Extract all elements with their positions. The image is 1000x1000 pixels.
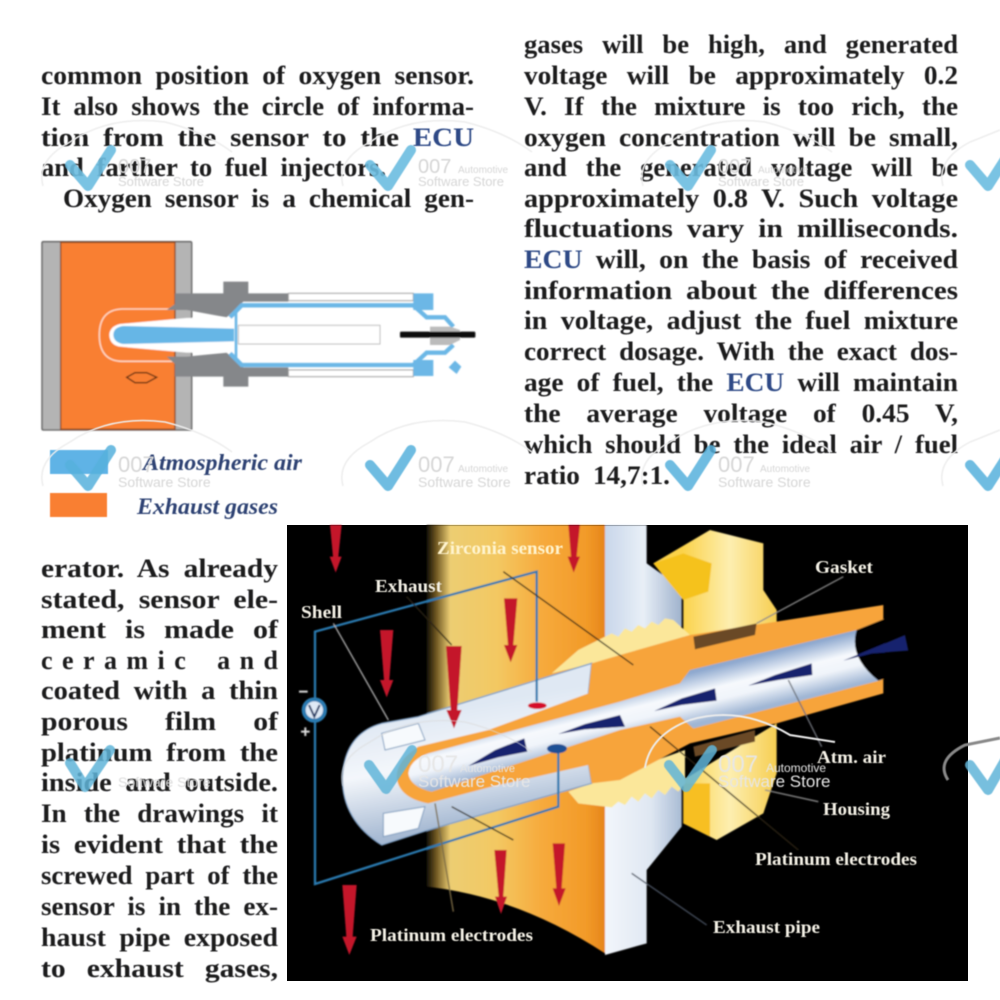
upper nut (653, 530, 777, 660)
top left text column: and farther to fuel injectors. (41, 153, 386, 182)
watermarks: Software Store (418, 174, 504, 189)
gaskets (693, 623, 757, 757)
bottom left text column: stated, sensor ele- (41, 585, 278, 614)
right text column: oxygen concentration will be small, (524, 123, 958, 152)
bottom left text column: haust pipe exposed (41, 923, 279, 952)
outer shield (342, 663, 592, 845)
bottom left text column (41, 554, 279, 983)
right text column: information about the differences (524, 276, 958, 305)
right text column: which should be the ideal air / fuel (524, 430, 958, 459)
polarity marks (299, 692, 310, 736)
watermarks (42, 121, 1000, 791)
bottom left text column: platinum from the (41, 738, 278, 767)
callouts (301, 538, 917, 945)
upper thread (552, 618, 690, 673)
watermarks: Software Store (718, 174, 804, 189)
slots in shield (382, 723, 425, 837)
bottom left text column: erator. As already (41, 554, 278, 583)
ceramic element (109, 317, 233, 353)
watermarks: Automotive (758, 165, 808, 176)
electrodes (528, 702, 547, 709)
exhaust pipe wall (427, 525, 605, 953)
label: atmospheric air: Atmospheric air (141, 450, 303, 475)
swatch: atmospheric air (50, 450, 108, 474)
bottom left text column: is evident that the (41, 830, 278, 859)
watermarks: 007 (418, 452, 455, 477)
callouts: Platinum electrodes (755, 849, 917, 869)
upper flange (605, 525, 682, 660)
lower nut (683, 723, 777, 840)
voltmeter symbol (309, 705, 320, 717)
leader lines (333, 572, 843, 925)
callouts: Shell (301, 602, 342, 622)
contact pin (400, 332, 475, 338)
right text column (524, 30, 959, 490)
right text column: approximately 0.8 V. Such voltage (524, 184, 958, 213)
terminal (430, 327, 460, 345)
watermark row 2 (42, 421, 1000, 486)
lower flange (605, 773, 682, 955)
bottom left text column: ment is made of (41, 615, 278, 644)
callouts: Platinum electrodes (370, 925, 533, 945)
bottom left text column: In the drawings it (41, 799, 278, 828)
photo diagram: sensor in exhaust pipe (287, 525, 968, 981)
lower thread (568, 750, 685, 807)
diagram: oxygen sensor cross-section (42, 242, 475, 430)
pipe wall (42, 242, 192, 430)
top left text column: common position of oxygen sensor. (41, 61, 474, 90)
watermarks: Automotive (458, 165, 508, 176)
label: exhaust gases: Exhaust gases (136, 494, 278, 519)
sensor body (397, 605, 883, 803)
watermarks: Automotive (460, 763, 515, 775)
watermarks: Automotive (766, 761, 826, 775)
watermarks: 007 (718, 156, 751, 178)
watermarks: 007 (718, 452, 755, 477)
right text column: fluctuations vary in milliseconds. (524, 214, 958, 243)
bottom left text column: sensor is in the ex- (41, 892, 278, 921)
watermarks: Software Store (118, 474, 211, 490)
right text column: V. If the mixture is too rich, the (524, 92, 958, 121)
right text column: ratio 14,7:1. (524, 461, 670, 490)
bottom left text column: porous film of (41, 707, 278, 736)
air bore (408, 620, 882, 792)
watermarks: Software Store (718, 772, 830, 791)
watermark row 1 (42, 121, 1000, 186)
black background (287, 525, 968, 981)
top left text column: tion from the sensor to the ECU (41, 123, 474, 152)
watermarks: 007 (718, 751, 758, 778)
atmospheric air chamber (113, 326, 234, 344)
watermarks: Software Store (118, 774, 211, 790)
protective cap outline (99, 309, 187, 361)
exhaust flow symbol (127, 373, 157, 383)
air drop (449, 361, 461, 374)
watermarks: Automotive (458, 464, 508, 475)
watermarks: Automotive (760, 464, 810, 475)
legend (50, 450, 303, 519)
right text column: ECU will, on the basis of received (524, 245, 959, 274)
inner rod (238, 325, 380, 344)
lower housing (167, 353, 288, 387)
bottom left text column: coated with a thin (41, 676, 279, 705)
bottom left text column: to exhaust gases, (41, 954, 278, 983)
callouts: Exhaust (375, 576, 442, 596)
watermarks: Software Store (418, 474, 511, 490)
artwork (299, 525, 908, 955)
watermark row 3 (342, 715, 1000, 786)
watermarks: Software Store (718, 474, 811, 490)
right text column: correct dosage. With the exact dos- (524, 337, 958, 366)
watermarks: 007 (118, 452, 155, 477)
bottom left text column: ceramic and (41, 646, 279, 675)
right text column: gases will be high, and generated (524, 30, 959, 59)
circuit wires (315, 572, 558, 884)
watermarks: 007 (418, 156, 451, 178)
top left text column: Oxygen sensor is a chemical gen- (63, 184, 474, 213)
top left text column: It also shows the circle of informa- (41, 92, 474, 121)
callouts: Exhaust pipe (713, 917, 820, 937)
bottom left text column: inside and outside. (41, 768, 278, 797)
upper housing (167, 282, 288, 317)
callouts: Zirconia sensor (437, 538, 563, 558)
bore opening (855, 619, 885, 681)
callouts: Gasket (815, 557, 873, 577)
voltmeter (304, 699, 325, 721)
watermarks: Software Store (118, 174, 204, 189)
watermarks: 007 (418, 751, 458, 778)
watermarks: 007 (118, 156, 151, 178)
top left text column (41, 61, 474, 213)
right text column: in voltage, adjust the fuel mixture (524, 306, 958, 335)
right text column: age of fuel, the ECU will maintain (524, 368, 959, 397)
watermarks: Software Store (418, 772, 530, 791)
callouts: Housing (823, 799, 890, 819)
swatch: exhaust gases (50, 493, 107, 517)
exhaust gas channel (61, 242, 175, 429)
blue air passage (230, 305, 453, 365)
right text column: and the generated voltage will be (524, 153, 958, 182)
callouts: Atm. air (817, 747, 886, 767)
bottom left text column: screwed part of the (41, 861, 278, 890)
outer sleeve (288, 293, 413, 377)
right text column: voltage will be approximately 0.2 (524, 61, 958, 90)
blue air arrows (468, 635, 908, 766)
red exhaust arrows (330, 525, 580, 955)
right text column: the average voltage of 0.45 V, (524, 399, 958, 428)
